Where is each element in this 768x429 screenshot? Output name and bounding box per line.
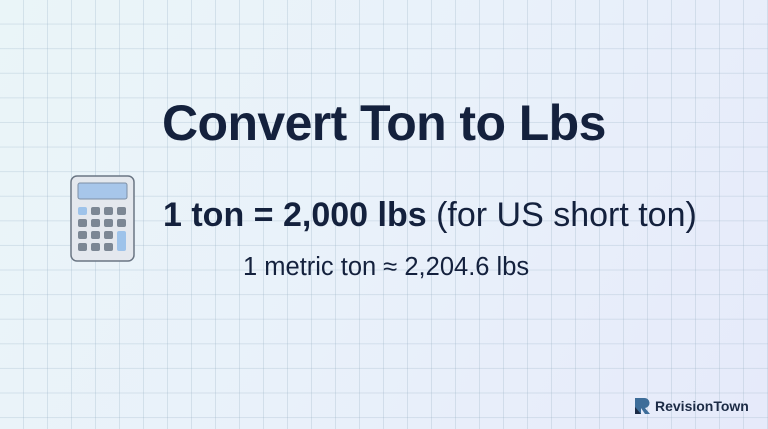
main equation: 1 ton = 2,000 lbs (for US short ton) — [163, 196, 697, 234]
secondary equation: 1 metric ton ≈ 2,204.6 lbs — [243, 253, 529, 281]
logo: RevisionTown — [655, 398, 749, 414]
title: Convert Ton to Lbs — [162, 95, 606, 151]
icon: calculator — [70, 175, 135, 262]
